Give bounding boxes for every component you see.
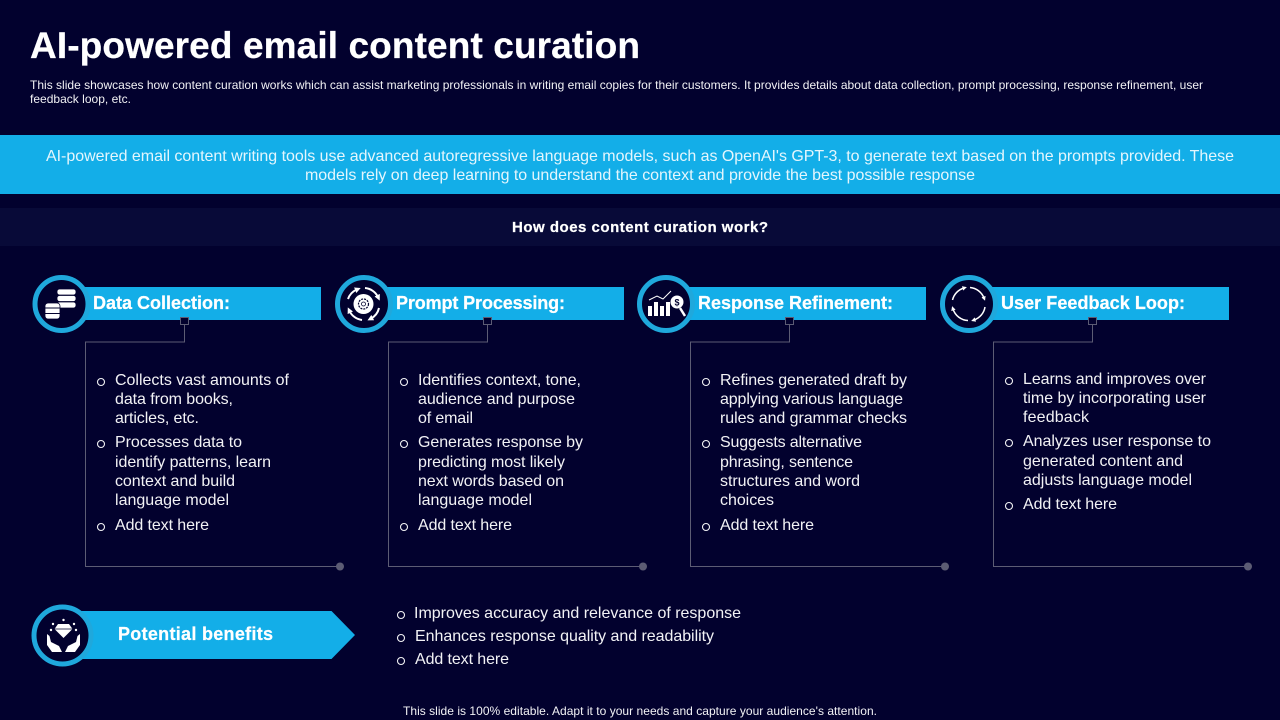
bullet list: Collects vast amounts of bbox=[115, 372, 290, 389]
arrow banner bbox=[62, 611, 355, 659]
icon: databases bbox=[35, 278, 88, 330]
bullet list: context and build bbox=[115, 473, 235, 490]
heading: Response Refinement: bbox=[698, 293, 893, 313]
connector bbox=[690, 318, 949, 570]
bullet list: next words based on bbox=[418, 473, 564, 490]
header bar bbox=[363, 287, 624, 320]
bullet list bbox=[98, 372, 290, 534]
bullet list: language model bbox=[115, 492, 229, 509]
header bar bbox=[60, 287, 321, 320]
section heading bar: How does content curation work? bbox=[512, 219, 768, 236]
bullet list: Identifies context, tone, bbox=[418, 372, 581, 389]
callout banner: models rely on deep learning to understand the context and provide the best possible response bbox=[305, 167, 975, 184]
panel: response refinement bbox=[640, 278, 949, 570]
bullet list: Analyzes user response to bbox=[1023, 433, 1211, 450]
heading: Prompt Processing: bbox=[396, 293, 565, 313]
connector bbox=[994, 318, 1252, 570]
bullet list: phrasing, sentence bbox=[720, 454, 853, 471]
callout banner bbox=[0, 135, 1280, 194]
bullet list: rules and grammar checks bbox=[720, 410, 907, 427]
bullet list: Processes data to bbox=[115, 434, 242, 451]
bullet list: Add text here bbox=[720, 517, 814, 534]
bullet list: Suggests alternative bbox=[720, 434, 862, 451]
bullet list bbox=[702, 372, 907, 534]
bullet list: of email bbox=[418, 410, 473, 427]
icon: gear with cycle arrows bbox=[338, 278, 390, 330]
bullet list: Refines generated draft by bbox=[720, 372, 907, 389]
header bar bbox=[665, 287, 926, 320]
bullet list: Generates response by bbox=[418, 434, 583, 451]
bullet list: Learns and improves over bbox=[1023, 371, 1207, 388]
icon: bar chart with magnifier bbox=[640, 278, 692, 330]
panel: prompt processing bbox=[338, 278, 647, 570]
heading: User Feedback Loop: bbox=[1001, 293, 1185, 313]
bullet list: data from books, bbox=[115, 391, 233, 408]
panel: data collection bbox=[35, 278, 344, 570]
bullet list: applying various language bbox=[720, 391, 903, 408]
icon: bar chart with magnifier: $ bbox=[674, 298, 680, 308]
bullet list: adjusts language model bbox=[1023, 472, 1192, 489]
icon: diamond in hands bbox=[34, 607, 91, 664]
icon: loop arrows bbox=[942, 278, 996, 330]
heading: Data Collection: bbox=[93, 293, 230, 313]
benefits list: Improves accuracy and relevance of response bbox=[414, 605, 741, 622]
bullet list: choices bbox=[720, 492, 774, 509]
benefits list: Add text here bbox=[415, 651, 509, 668]
benefits list: Enhances response quality and readability bbox=[415, 628, 714, 645]
subtitle description bbox=[30, 78, 1203, 106]
bullet list: structures and word bbox=[720, 473, 860, 490]
section heading bar bbox=[0, 208, 1280, 246]
panel: potential benefits bbox=[34, 605, 741, 668]
benefits list bbox=[398, 605, 741, 668]
callout banner: AI-powered email content writing tools use advanced autoregressive language models, such as OpenAI's GPT-3, to generate text based on the prompts provided. These bbox=[46, 148, 1234, 165]
bullet list: generated content and bbox=[1023, 453, 1183, 470]
bullet list: time by incorporating user bbox=[1023, 390, 1207, 407]
heading: Potential benefits bbox=[118, 624, 273, 644]
bullet list bbox=[400, 372, 583, 534]
bullet list: Add text here bbox=[115, 517, 209, 534]
connector bbox=[86, 318, 344, 570]
bullet list: Add text here bbox=[1023, 496, 1117, 513]
bullet list: language model bbox=[418, 492, 532, 509]
bullet list bbox=[1006, 371, 1211, 513]
bullet list: feedback bbox=[1023, 409, 1090, 426]
bullet list: audience and purpose bbox=[418, 391, 575, 408]
bullet list: predicting most likely bbox=[418, 454, 565, 471]
bullet list: articles, etc. bbox=[115, 410, 199, 427]
subtitle description: This slide showcases how content curation works which can assist marketing professionals in writing email copies for their customers. It provides details about data collection, prompt processing, response refinement, user bbox=[30, 78, 1203, 92]
subtitle description: feedback loop, etc. bbox=[30, 92, 131, 106]
panel: user feedback loop bbox=[942, 278, 1252, 570]
bullet list: identify patterns, learn bbox=[115, 454, 271, 471]
header bar bbox=[968, 287, 1229, 320]
footer note: This slide is 100% editable. Adapt it to your needs and capture your audience's attention. bbox=[403, 704, 877, 718]
title: AI-powered email content curation bbox=[30, 25, 640, 66]
bullet list: Add text here bbox=[418, 517, 512, 534]
connector bbox=[388, 318, 647, 570]
